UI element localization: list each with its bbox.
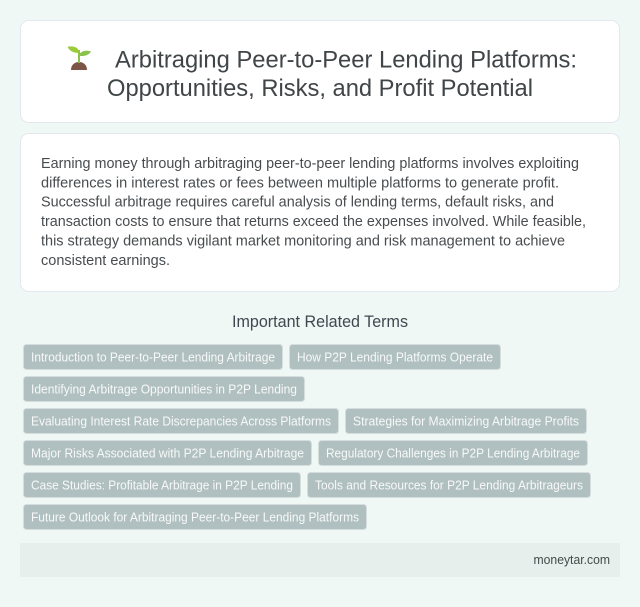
- tag: regulatory challenges: [318, 440, 588, 466]
- text block: description: Earning money through arbitraging peer-to-peer lending platforms involves exploiting: [41, 156, 579, 172]
- text block: description: [41, 156, 586, 269]
- tag: case studies: Case Studies: Profitable Arbitrage in P2P Lending: [31, 478, 293, 492]
- tag: interest rate discrepancies: [24, 408, 338, 434]
- panel: description: [20, 134, 620, 292]
- tag: tools and resources: [308, 472, 590, 498]
- footer: [20, 543, 620, 577]
- tag: how platforms operate: How P2P Lending Platforms Operate: [297, 350, 493, 364]
- tag: interest rate discrepancies: Evaluating Interest Rate Discrepancies Across Platforms: [31, 414, 331, 428]
- tag: future outlook: Future Outlook for Arbitraging Peer-to-Peer Lending Platforms: [31, 510, 359, 524]
- text block: description: differences in interest rates or fees between multiple platforms to generate profit.: [41, 175, 559, 191]
- tag: maximizing profits: Strategies for Maximizing Arbitrage Profits: [353, 414, 579, 428]
- text block: description: transaction costs to ensure that returns exceed the expenses involved. While feasible,: [41, 214, 586, 230]
- tag: introduction: Introduction to Peer-to-Peer Lending Arbitrage: [31, 350, 275, 364]
- title: Opportunities, Risks, and Profit Potential: [107, 75, 533, 102]
- icon: seedling: [68, 46, 91, 70]
- text block: description: this strategy demands vigilant market monitoring and risk management to achieve: [41, 234, 565, 250]
- tag: future outlook: [24, 504, 366, 530]
- heading: related terms: Important Related Terms: [232, 313, 408, 331]
- tag: identifying opportunities: Identifying Arbitrage Opportunities in P2P Lending: [31, 382, 297, 396]
- tag: regulatory challenges: Regulatory Challenges in P2P Lending Arbitrage: [326, 446, 580, 460]
- tag: major risks: [24, 440, 312, 466]
- title: Arbitraging Peer-to-Peer Lending Platforms:: [115, 46, 577, 74]
- title: [107, 46, 577, 102]
- panel: title card: [20, 20, 620, 122]
- tag: maximizing profits: [346, 408, 586, 434]
- footer site name: moneytar.com: [534, 552, 610, 567]
- tag list: related terms: [24, 344, 590, 530]
- tag: tools and resources: Tools and Resources for P2P Lending Arbitrageurs: [315, 478, 583, 492]
- tag: case studies: [24, 472, 300, 498]
- tag: how platforms operate: [290, 344, 500, 370]
- text block: description: consistent earnings.: [41, 253, 170, 269]
- tag: identifying opportunities: [24, 376, 304, 402]
- text block: description: Successful arbitrage requires careful analysis of lending terms, default risks, and: [41, 195, 554, 211]
- tag: introduction: [24, 344, 282, 370]
- tag: major risks: Major Risks Associated with P2P Lending Arbitrage: [31, 446, 304, 460]
